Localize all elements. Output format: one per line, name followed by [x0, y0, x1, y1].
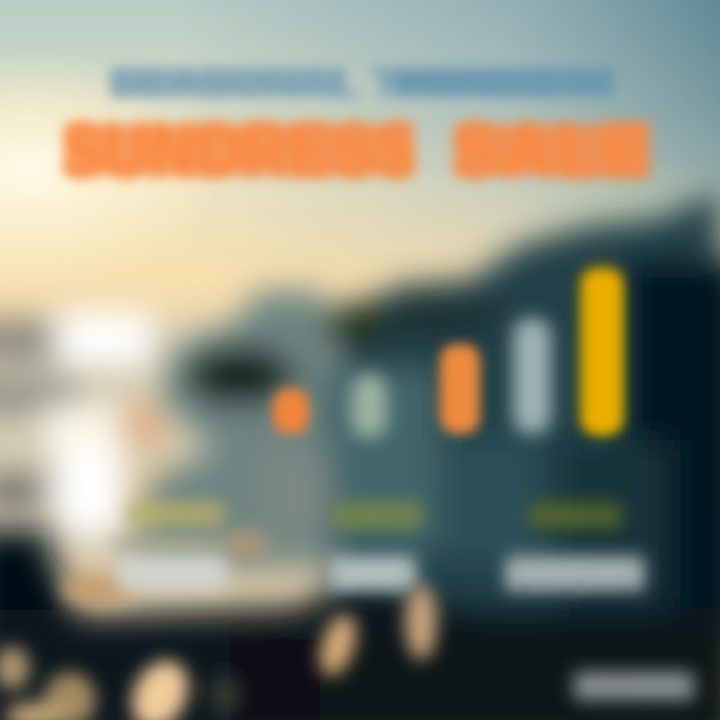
value 2: [330, 556, 416, 590]
season label text: SPRING: [130, 503, 222, 530]
label 1: season: [128, 502, 224, 526]
title: [60, 59, 652, 196]
bar chart: [273, 264, 626, 438]
season label text: [130, 502, 621, 532]
background: dark hillside: [0, 190, 720, 720]
value 3: [506, 556, 644, 590]
season label text: SUMMER: [333, 502, 421, 532]
bar 5: yellow: [578, 264, 626, 438]
bar labels: [128, 502, 622, 528]
warm foreground patches: [60, 529, 269, 606]
bar 3: orange: [440, 344, 480, 434]
bar 2: pale teal: [351, 374, 387, 438]
title line: main heading in orange: SALE: [450, 105, 652, 196]
value label text: [120, 557, 642, 599]
bar 1: orange: [273, 388, 309, 434]
title line: subtitle in blue: SEASONAL TRENDS IN: [108, 59, 614, 106]
label 2: season: [332, 502, 422, 528]
value label text: LOW: [120, 557, 224, 599]
title line: main heading in orange: SUNDRESS: [60, 105, 418, 196]
season label text: FALL: [531, 502, 621, 532]
background: sea and light reflection: [0, 312, 240, 565]
label 3: season: [530, 502, 622, 528]
value label text: MID: [330, 557, 414, 599]
decorative foreground figures: [0, 584, 437, 720]
value label text: HIGH: [506, 557, 642, 599]
bar 4: pale blue: [513, 318, 551, 434]
source note: SOURCE: [574, 671, 694, 707]
value 1: [118, 556, 226, 590]
value labels: [118, 556, 644, 590]
